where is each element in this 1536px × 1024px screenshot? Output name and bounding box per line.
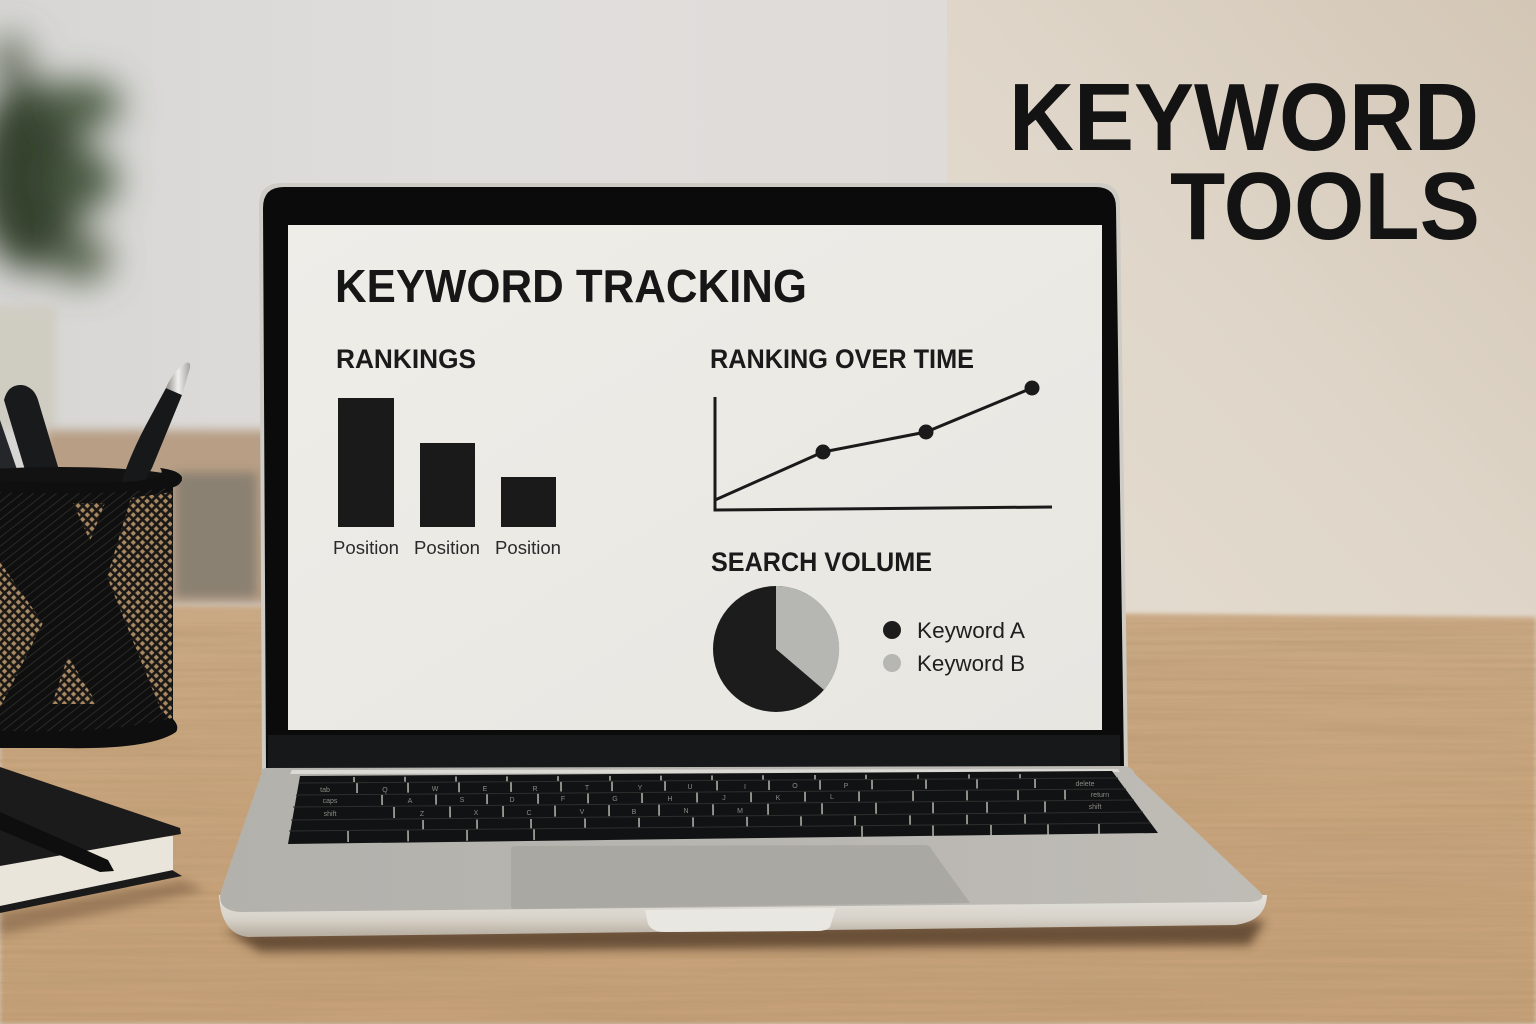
top cover xyxy=(0,767,181,866)
hinge light strip xyxy=(290,769,1120,774)
key legends: O xyxy=(792,783,798,790)
mesh: left diamond xyxy=(0,548,43,728)
key legends: Z xyxy=(420,811,425,818)
key legends xyxy=(320,781,1109,818)
panel: rankings xyxy=(333,344,561,558)
key legends: W xyxy=(432,786,439,793)
pen: far left xyxy=(0,420,24,490)
notebook shadow xyxy=(0,880,205,935)
lower cover xyxy=(0,870,182,913)
pen on notebook xyxy=(0,812,114,872)
bar labels: Position xyxy=(495,538,561,558)
key legends: T xyxy=(585,785,590,792)
laptop xyxy=(219,183,1267,937)
lid opening notch xyxy=(645,908,836,932)
key legends: E xyxy=(483,786,488,793)
title: keyword tools xyxy=(1009,64,1480,260)
key legends: R xyxy=(532,786,538,793)
key legends: tab xyxy=(320,787,330,794)
bar labels: Position xyxy=(414,538,480,558)
screen display xyxy=(288,225,1102,730)
cup back rim xyxy=(0,467,182,493)
key legends: Q xyxy=(382,787,388,794)
key legends: X xyxy=(474,810,479,817)
key legends: A xyxy=(408,798,413,805)
title: keyword tools: TOOLS xyxy=(1170,153,1480,260)
key legends: M xyxy=(737,808,743,815)
desk surface xyxy=(0,604,1536,1024)
laptop shadow xyxy=(225,920,1265,952)
mesh: upper triangle xyxy=(73,503,105,541)
key separators xyxy=(348,774,1099,842)
pen: right with silver tip xyxy=(120,363,190,486)
heading: ranking over time: RANKING OVER TIME xyxy=(710,344,974,374)
keyboard xyxy=(288,771,1158,844)
mesh: lower triangle xyxy=(52,656,97,704)
key legends: L xyxy=(830,794,834,801)
key legends: S xyxy=(460,797,465,804)
key legends: I xyxy=(744,784,746,791)
panel: search volume xyxy=(711,547,1025,712)
key legends: H xyxy=(667,796,673,803)
key legends: shift xyxy=(1089,804,1101,811)
key legends: K xyxy=(776,795,781,802)
key legends: V xyxy=(580,809,585,816)
title: keyword tools: KEYWORD xyxy=(1009,64,1479,171)
key legends: B xyxy=(632,809,637,816)
key legends: N xyxy=(683,808,689,815)
pie chart xyxy=(713,586,839,712)
key legends: J xyxy=(722,795,726,802)
cup base ring xyxy=(0,718,177,748)
panel: ranking over time xyxy=(710,344,1052,510)
key legends: G xyxy=(612,796,618,803)
cup top rim xyxy=(0,468,182,493)
deck xyxy=(220,766,1262,912)
trackpad xyxy=(511,845,970,909)
bar labels: Position xyxy=(333,538,399,558)
pencil holder with pens xyxy=(0,363,190,748)
heading: search volume: SEARCH VOLUME xyxy=(711,547,932,577)
key legends: D xyxy=(509,797,515,804)
key legends: U xyxy=(687,784,693,791)
key legends: P xyxy=(844,783,849,790)
legend xyxy=(883,618,1025,676)
notebook with pen xyxy=(0,767,205,935)
key legends: C xyxy=(526,810,532,817)
heading: rankings: RANKINGS xyxy=(336,344,476,374)
key legends: delete xyxy=(1075,781,1095,788)
key legends: shift xyxy=(324,811,336,818)
background: blurred wooden console xyxy=(45,430,275,605)
legend: Keyword B xyxy=(917,651,1025,676)
background: wall xyxy=(0,0,1536,640)
key legends: Y xyxy=(638,785,643,792)
pages xyxy=(0,836,173,906)
laptop base xyxy=(219,766,1267,937)
bar chart xyxy=(338,398,556,527)
front edge xyxy=(219,895,1267,937)
key legends: F xyxy=(561,796,565,803)
mesh: right region xyxy=(107,492,172,722)
bar labels xyxy=(333,538,561,558)
key legends: return xyxy=(1091,792,1109,799)
cup body with pens seen through mesh xyxy=(0,484,173,734)
key legends: caps xyxy=(323,798,338,805)
legend: Keyword A xyxy=(917,618,1025,643)
pen: left rounded xyxy=(4,385,68,500)
background: blurred plant xyxy=(0,36,122,282)
laptop lid xyxy=(259,183,1128,770)
background: blurred plant pot xyxy=(0,305,56,430)
heading: keyword tracking: KEYWORD TRACKING xyxy=(335,260,807,312)
line chart xyxy=(715,380,1052,510)
